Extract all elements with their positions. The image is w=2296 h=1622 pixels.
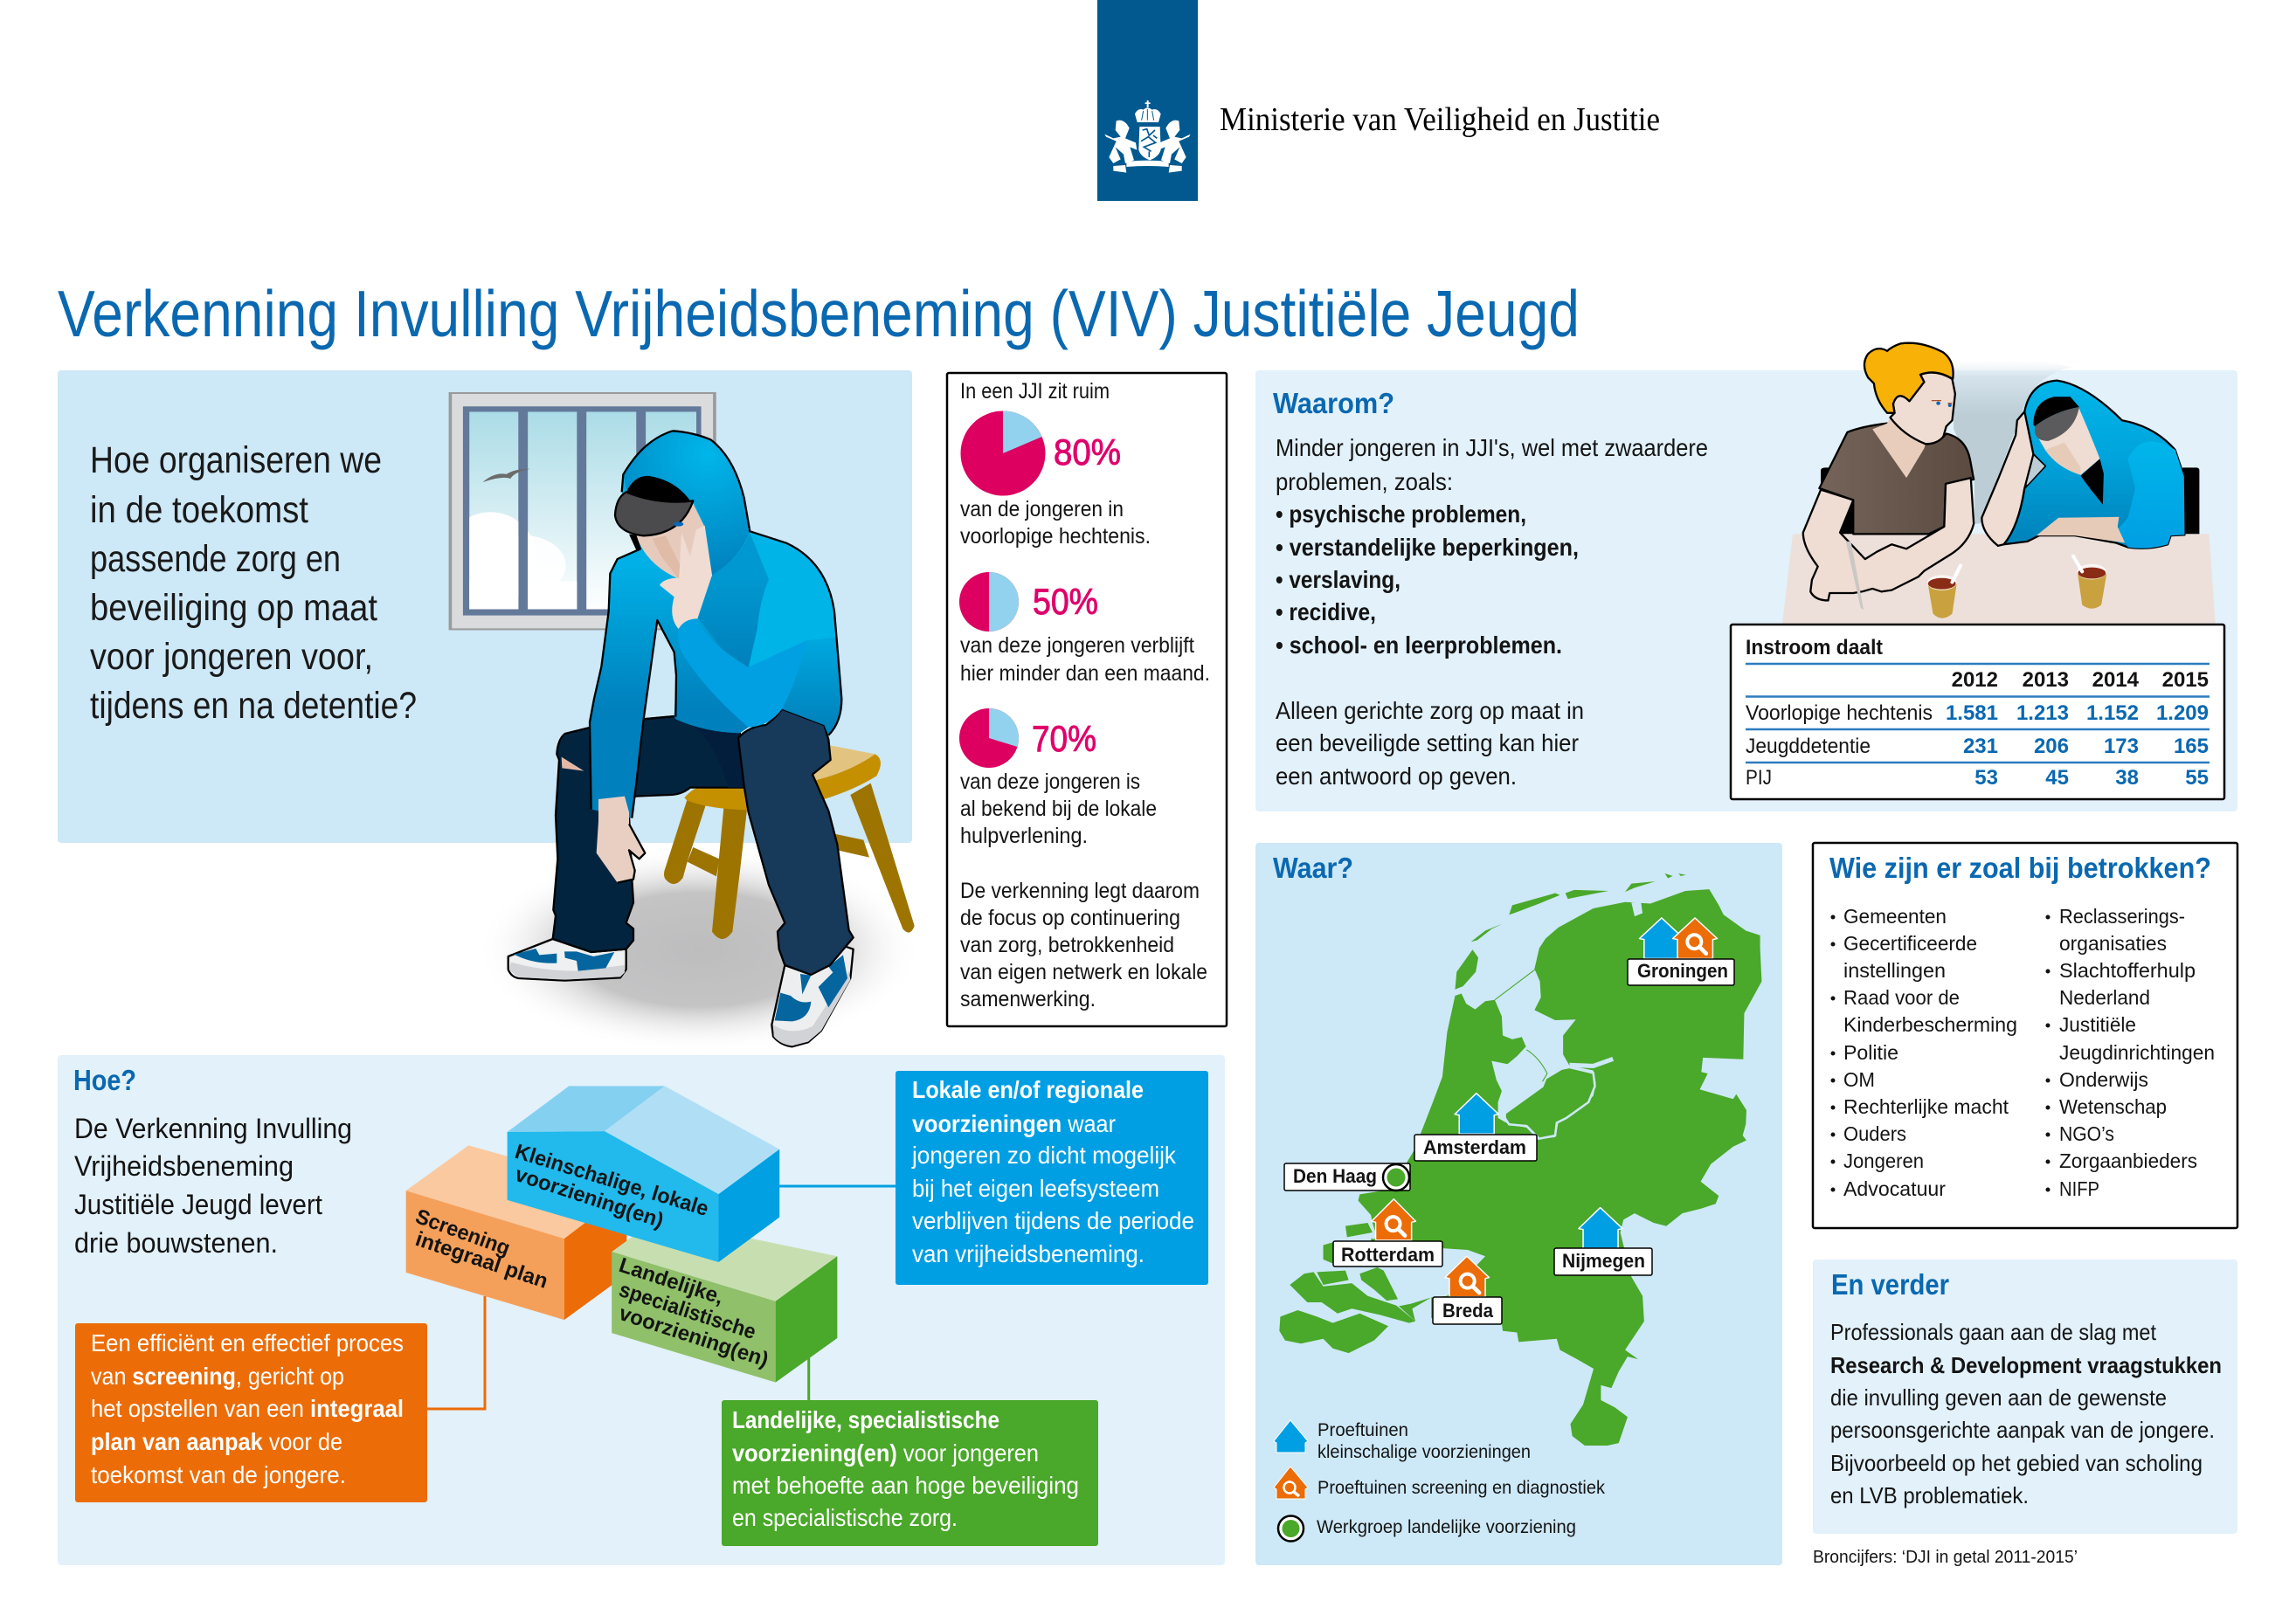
icon: Nijmegen small-scale xyxy=(1579,1208,1622,1248)
icon: Rotterdam screening xyxy=(1372,1199,1415,1240)
table: Instroom daalt: 2014 xyxy=(2092,668,2140,692)
question text: tijdens en na detentie? xyxy=(90,685,417,727)
city label: Den Haag with marker: Den Haag xyxy=(1293,1165,1377,1187)
table: Instroom daalt: 45 xyxy=(2045,766,2069,790)
legend: Proeftuinen screening en diagnostiek xyxy=(1317,1478,1605,1498)
callout: landelijke voorziening: en specialistische zorg. xyxy=(732,1504,958,1531)
panel: En verder xyxy=(1813,1260,2237,1534)
table: Instroom daalt: 1.152 xyxy=(2086,701,2139,725)
stool xyxy=(664,745,915,939)
callout: screening: het opstellen van een integraal xyxy=(91,1395,404,1422)
reasons text: • verstandelijke beperkingen, xyxy=(1276,534,1579,561)
list: left column: Gecertificeerde xyxy=(1843,932,1977,955)
question text: in de toekomst xyxy=(90,489,308,531)
intro text xyxy=(74,1113,352,1259)
city label: Amsterdam: Amsterdam xyxy=(1423,1136,1526,1158)
table: Instroom daalt: Instroom daalt xyxy=(1746,636,1883,659)
building block: kleinschalig xyxy=(508,1086,779,1262)
building block: landelijk: voorziening(en) xyxy=(616,1301,771,1372)
reasons text: een beveiligde setting kan hier xyxy=(1276,729,1579,756)
stat text: hulpverlening. xyxy=(960,824,1088,848)
right shoe xyxy=(771,946,854,1046)
table: Instroom daalt: Voorlopige hechtenis xyxy=(1746,701,1933,725)
stat text: van deze jongeren verblijft xyxy=(960,633,1194,658)
reasons text: • psychische problemen, xyxy=(1276,500,1526,528)
icon: orange house xyxy=(1274,1467,1308,1499)
panel: Waarom? xyxy=(1255,370,2237,811)
table: Instroom daalt: 53 xyxy=(1974,766,1998,790)
stat text xyxy=(960,770,1157,848)
intro text: De Verkenning Invulling xyxy=(74,1113,352,1144)
panel: Hoe? xyxy=(58,1055,1225,1565)
table: Instroom daalt: Jeugddetentie xyxy=(1746,735,1871,758)
list: left column: Kinderbescherming xyxy=(1843,1013,2017,1036)
illustration: barred window xyxy=(445,393,715,629)
reasons text: Alleen gerichte zorg op maat in xyxy=(1276,697,1584,724)
intro text: Vrijheidsbeneming xyxy=(74,1150,294,1182)
panel: Waar? xyxy=(1255,843,1782,1565)
illustration: boy in hoodie on a stool xyxy=(508,431,915,1046)
callout: screening: Een efficiënt en effectief proces xyxy=(91,1329,404,1356)
logo: Rijksoverheid ribbon with crest xyxy=(1097,0,1660,201)
person one xyxy=(1803,343,1974,610)
callout: screening: van screening, gericht op xyxy=(91,1363,344,1390)
building block: screening xyxy=(406,1145,633,1320)
table: Instroom daalt: 206 xyxy=(2034,735,2069,758)
pie chart: 80% xyxy=(961,411,1045,496)
icon: green marker xyxy=(1278,1516,1304,1541)
stat text: hier minder dan een maand. xyxy=(960,661,1210,686)
callout: lokale voorzieningen: verblijven tijdens de periode xyxy=(912,1207,1194,1234)
callout: lokale voorzieningen: voorzieningen waar xyxy=(912,1110,1116,1137)
stat: 80%: 80% xyxy=(1054,431,1121,473)
icon: Groningen screening xyxy=(1673,918,1718,958)
callout: landelijke voorziening: met behoefte aan hoge beveiliging xyxy=(732,1472,1079,1499)
icon: Amsterdam small-scale xyxy=(1455,1094,1498,1134)
list: left column: Gemeenten xyxy=(1843,905,1947,928)
title: Verkenning Invulling Vrijheidsbeneming (VIV) Justitiële Jeugd xyxy=(58,277,1580,350)
heading: Hoe? xyxy=(73,1064,136,1096)
intro text: Justitiële Jeugd levert xyxy=(74,1189,322,1220)
callout: landelijke voorziening xyxy=(722,1400,1098,1546)
list: right column: Zorgaanbieders xyxy=(2059,1149,2197,1172)
city label: Rotterdam: Rotterdam xyxy=(1341,1244,1435,1266)
list: right column: Wetenschap xyxy=(2059,1095,2167,1118)
table: Instroom daalt: 38 xyxy=(2115,766,2139,790)
heading: En verder xyxy=(1831,1268,1949,1301)
icon: blue house xyxy=(1274,1420,1308,1453)
list: right column: Slachtofferhulp xyxy=(2059,959,2196,982)
hoodie xyxy=(590,431,841,818)
stat: 70%: 70% xyxy=(1032,718,1096,759)
reasons text xyxy=(1276,434,1708,790)
body text: die invulling geven aan de gewenste xyxy=(1830,1384,2167,1411)
city label: Groningen: Groningen xyxy=(1637,960,1728,982)
list: right column: organisaties xyxy=(2059,932,2167,955)
table: Instroom daalt: PIJ xyxy=(1746,766,1772,790)
city label: Breda: Breda xyxy=(1442,1300,1494,1322)
question text: voor jongeren voor, xyxy=(90,636,373,678)
list: left column: Rechterlijke macht xyxy=(1843,1095,2009,1118)
question text: Hoe organiseren we xyxy=(90,439,382,481)
pie chart: 70% xyxy=(959,708,1019,768)
list: left column: Advocatuur xyxy=(1843,1177,1946,1200)
list: right column: NGO’s xyxy=(2059,1122,2114,1145)
stat text: van deze jongeren is xyxy=(960,770,1140,794)
reasons text: • verslaving, xyxy=(1276,566,1400,593)
list: right column: Nederland xyxy=(2059,986,2150,1009)
closing text: van eigen netwerk en lokale xyxy=(960,960,1207,984)
reasons text: • recidive, xyxy=(1276,598,1376,625)
body text: Research & Development vraagstukken xyxy=(1830,1352,2222,1378)
table: Instroom daalt: 2012 xyxy=(1952,668,1998,692)
face and hand xyxy=(615,476,712,629)
panel: question xyxy=(58,370,912,843)
list: right column: NIFP xyxy=(2059,1177,2099,1200)
question text: passende zorg en xyxy=(90,538,341,580)
table: Instroom daalt xyxy=(1731,625,2224,799)
icon: Groningen small-scale xyxy=(1639,918,1684,958)
person two xyxy=(1981,381,2184,549)
intro: In een JJI zit ruim xyxy=(960,379,1110,404)
list: right column: Justitiële xyxy=(2059,1013,2136,1036)
body text: en LVB problematiek. xyxy=(1830,1482,2029,1508)
list: left column: Ouders xyxy=(1843,1122,1906,1145)
table: Instroom daalt: 1.581 xyxy=(1946,701,1998,725)
building block: kleinschalig: Kleinschalige, lokale xyxy=(512,1140,711,1221)
body text: persoonsgerichte aanpak van de jongere. xyxy=(1830,1417,2215,1443)
callout: lokale voorzieningen: jongeren zo dicht mogelijk xyxy=(911,1142,1177,1169)
left shoe xyxy=(508,939,626,981)
stat: 50%: 50% xyxy=(1033,581,1098,622)
heading: Waarom? xyxy=(1273,387,1394,419)
heading: Waar? xyxy=(1273,852,1353,884)
hoodie outline xyxy=(590,431,841,818)
closing text: samenwerking. xyxy=(960,987,1096,1011)
table: Instroom daalt: 173 xyxy=(2104,735,2139,758)
cups xyxy=(1927,556,2106,618)
panel: Wie zijn er zoal bij betrokken? xyxy=(1813,843,2237,1228)
callout: lokale voorzieningen: bij het eigen leefsysteem xyxy=(912,1175,1159,1202)
table: Instroom daalt: 165 xyxy=(2174,735,2209,758)
list: left column xyxy=(1833,905,2017,1200)
icon: Breda screening xyxy=(1445,1256,1489,1297)
source note: Broncijfers: ‘DJI in getal 2011-2015’ xyxy=(1813,1548,2078,1567)
list: right column: Onderwijs xyxy=(2059,1068,2148,1091)
list: left column: Jongeren xyxy=(1843,1149,1924,1172)
question text: beveiliging op maat xyxy=(90,587,377,629)
icon: royal crest xyxy=(1104,100,1191,173)
hanging hand xyxy=(597,797,645,883)
stat text: voorlopige hechtenis. xyxy=(960,524,1151,549)
building block: screening: Screening xyxy=(412,1204,513,1260)
reasons text: een antwoord op geven. xyxy=(1276,763,1517,790)
list: right column: Reclasserings- xyxy=(2059,905,2185,928)
list: left column: instellingen xyxy=(1843,959,1946,982)
question text xyxy=(90,439,417,727)
legend: Proeftuinen xyxy=(1317,1420,1408,1440)
body text: Professionals gaan aan de slag met xyxy=(1830,1319,2157,1345)
logo text: Ministerie van Veiligheid en Justitie xyxy=(1220,101,1660,138)
illustration: floor shadow xyxy=(476,846,922,1053)
callout: landelijke voorziening: voorziening(en) voor jongeren xyxy=(732,1439,1039,1467)
list: left column: OM xyxy=(1843,1068,1875,1091)
stat text xyxy=(960,497,1151,549)
callout: screening xyxy=(75,1323,427,1502)
list: left column: Raad voor de xyxy=(1843,986,1960,1009)
pie chart: 50% xyxy=(959,572,1019,632)
stat text xyxy=(960,633,1210,686)
reasons text: • school- en leerproblemen. xyxy=(1276,632,1562,659)
table: Instroom daalt: 2013 xyxy=(2023,668,2069,692)
callout: lokale voorzieningen: van vrijheidsbeneming. xyxy=(912,1240,1145,1267)
building block: landelijk: specialistische xyxy=(616,1278,759,1344)
callout: screening: toekomst van de jongere. xyxy=(91,1461,346,1488)
table: Instroom daalt: 1.209 xyxy=(2156,701,2209,725)
callout: landelijke voorziening: Landelijke, specialistische xyxy=(732,1406,999,1433)
legend xyxy=(1274,1420,1605,1541)
callout: lokale voorzieningen xyxy=(896,1071,1208,1285)
city label: Nijmegen: Nijmegen xyxy=(1562,1250,1645,1272)
callout: screening: plan van aanpak voor de xyxy=(91,1428,342,1455)
closing text: de focus op continuering xyxy=(960,906,1180,930)
closing text xyxy=(960,879,1207,1011)
list: left column: Politie xyxy=(1843,1041,1898,1064)
table: Instroom daalt: 1.213 xyxy=(2016,701,2069,725)
house icons on map xyxy=(1372,918,1718,1297)
city label: Breda xyxy=(1433,1297,1502,1324)
legend: Werkgroep landelijke voorziening xyxy=(1317,1517,1576,1537)
panel: statistics xyxy=(947,373,1227,1026)
stat text: van de jongeren in xyxy=(960,497,1124,521)
front jeans xyxy=(738,709,854,975)
table: Instroom daalt: 2015 xyxy=(2162,668,2209,692)
table: Instroom daalt: 231 xyxy=(1963,735,1998,758)
reasons text: Minder jongeren in JJI's, wel met zwaardere xyxy=(1276,434,1708,461)
stat text: al bekend bij de lokale xyxy=(960,797,1157,821)
connector lines xyxy=(779,1184,896,1188)
city label: Den Haag with marker xyxy=(1284,1163,1410,1191)
building block: screening: integraal plan xyxy=(412,1227,550,1294)
reasons text: problemen, zoals: xyxy=(1276,468,1453,495)
building block: landelijk xyxy=(612,1219,837,1383)
intro text: drie bouwstenen. xyxy=(74,1227,278,1259)
illustration: two people at a table xyxy=(1781,343,2216,629)
body text xyxy=(1830,1319,2222,1508)
heading: Wie zijn er zoal bij betrokken? xyxy=(1829,852,2211,884)
back jeans xyxy=(553,716,744,952)
building block: kleinschalig: voorziening(en) xyxy=(512,1163,667,1232)
list: right column xyxy=(2048,905,2215,1200)
body text: Bijvoorbeeld op het gebied van scholing xyxy=(1830,1450,2203,1476)
closing text: De verkenning legt daarom xyxy=(960,879,1200,903)
map: Netherlands xyxy=(1279,873,1761,1446)
table: Instroom daalt: 55 xyxy=(2185,766,2209,790)
building block: landelijk: Landelijke, xyxy=(616,1253,726,1309)
callout: lokale voorzieningen: Lokale en/of regionale xyxy=(912,1076,1144,1103)
list: right column: Jeugdinrichtingen xyxy=(2059,1041,2215,1064)
legend: kleinschalige voorzieningen xyxy=(1317,1442,1531,1462)
closing text: van zorg, betrokkenheid xyxy=(960,933,1174,957)
